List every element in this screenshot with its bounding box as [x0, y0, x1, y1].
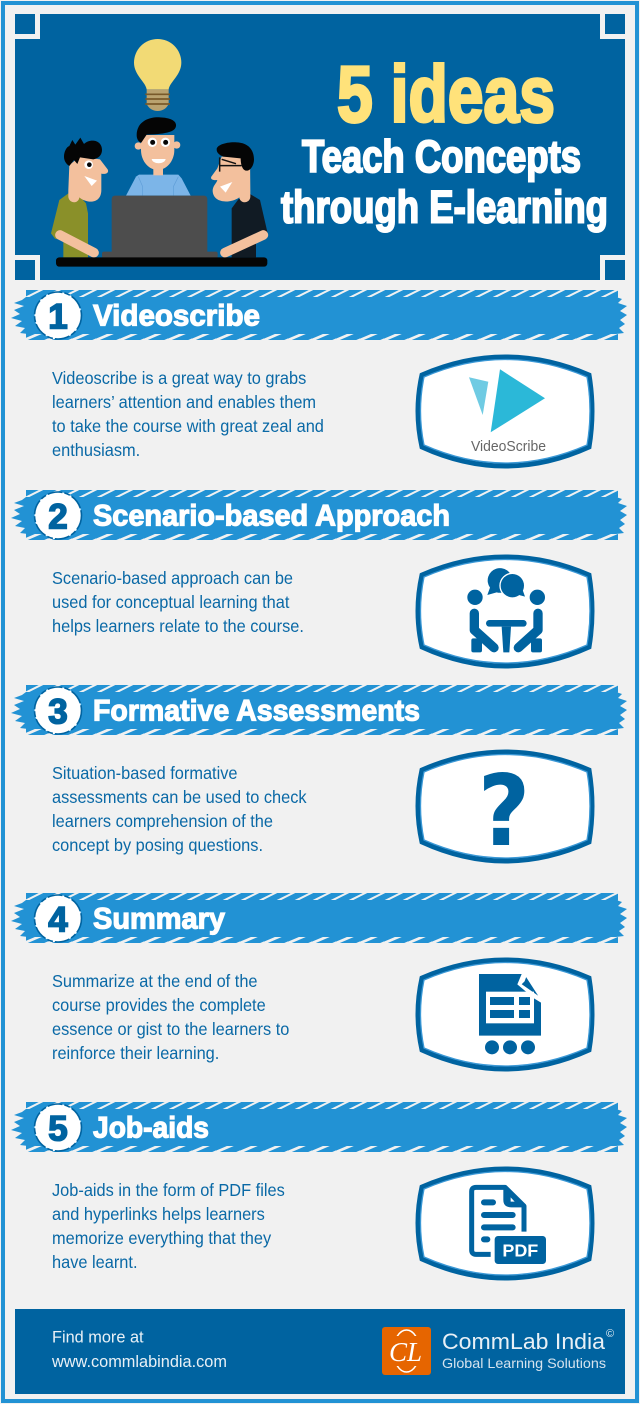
- icon: light bulb: [134, 39, 181, 111]
- section 3: [11, 685, 627, 869]
- person: centre: [126, 117, 191, 196]
- icon: PDF document badge: [418, 1169, 592, 1278]
- section 4: [11, 893, 627, 1069]
- footer text: www.commlabindia.com: [51, 1352, 227, 1371]
- title: Teach Concepts: Teach Concepts: [302, 131, 581, 182]
- footer panel: [15, 1309, 625, 1394]
- footer text: Find more at: [52, 1327, 144, 1347]
- icon: question mark badge: ?: [478, 755, 530, 869]
- banner 4: [11, 893, 627, 943]
- icon: summary document badge: [418, 960, 592, 1069]
- icon: question mark badge: [418, 752, 592, 869]
- banner 4: Summary: [93, 902, 225, 936]
- banner 1: Videoscribe: [93, 300, 260, 332]
- logo: CommLab India: CL: [389, 1337, 422, 1367]
- text block 2: helps learners relate to the course.: [52, 617, 304, 636]
- text block 3: assessments can be used to check: [52, 788, 307, 807]
- text block 5: and hyperlinks helps learners: [52, 1205, 265, 1224]
- text block 5: have learnt.: [52, 1253, 137, 1272]
- logo: CommLab India: ©: [606, 1328, 614, 1340]
- header panel: [15, 14, 625, 280]
- text block 1: Videoscribe is a great way to grabs: [52, 369, 306, 388]
- text block 4: course provides the complete: [52, 996, 266, 1015]
- text block 4: Summarize at the end of the: [52, 972, 258, 991]
- text block 5: [52, 1181, 285, 1272]
- banner 5: 5: [48, 1110, 68, 1148]
- banner 5: Job-aids: [93, 1112, 209, 1144]
- text block 1: learners’ attention and enables them: [52, 393, 316, 412]
- icon: meeting badge: [418, 557, 592, 666]
- text block 1: [52, 369, 324, 460]
- text block 3: [52, 764, 307, 855]
- text block 5: Job-aids in the form of PDF files: [52, 1181, 285, 1200]
- text block 4: reinforce their learning.: [52, 1044, 219, 1063]
- text block 2: used for conceptual learning that: [52, 593, 290, 612]
- banner 3: Formative Assessments: [93, 694, 420, 728]
- banner 2: 2: [48, 498, 68, 536]
- icon: VideoScribe badge: [418, 357, 592, 466]
- person: right: [211, 142, 268, 257]
- illustration: three people with laptop and light bulb: [51, 39, 268, 267]
- text block 3: concept by posing questions.: [52, 836, 263, 855]
- text block 4: essence or gist to the learners to: [52, 1020, 289, 1039]
- banner 3: [11, 685, 627, 735]
- logo: CommLab India: [382, 1327, 614, 1375]
- banner 1: [11, 290, 627, 340]
- footer text: [51, 1327, 227, 1371]
- logo: CommLab India: Global Learning Solutions: [442, 1355, 606, 1371]
- text block 5: memorize everything that they: [52, 1229, 272, 1248]
- section 1: [11, 290, 627, 466]
- banner 3: 3: [48, 692, 68, 732]
- laptop and table: [56, 196, 267, 267]
- banner 5: [11, 1102, 627, 1152]
- person: left: [51, 138, 108, 257]
- banner 2: [11, 490, 627, 540]
- text block 4: [52, 972, 289, 1063]
- title: 5 ideas: 5 ideas: [337, 50, 555, 138]
- text block 1: enthusiasm.: [52, 441, 140, 460]
- text block 2: [52, 569, 304, 636]
- text block 1: to take the course with great zeal and: [52, 417, 324, 436]
- icon: VideoScribe badge: VideoScribe: [471, 438, 546, 455]
- icon: PDF document badge: PDF: [502, 1241, 538, 1261]
- text block 2: Scenario-based approach can be: [52, 569, 293, 588]
- banner 2: Scenario-based Approach: [93, 500, 450, 532]
- banner 4: 4: [48, 900, 68, 940]
- banner 1: 1: [48, 298, 68, 336]
- text block 3: learners comprehension of the: [52, 812, 273, 831]
- section 5: [11, 1102, 627, 1278]
- text block 3: Situation-based formative: [52, 764, 238, 783]
- section 2: [11, 490, 627, 666]
- logo: CommLab India: CommLab India: [442, 1329, 606, 1354]
